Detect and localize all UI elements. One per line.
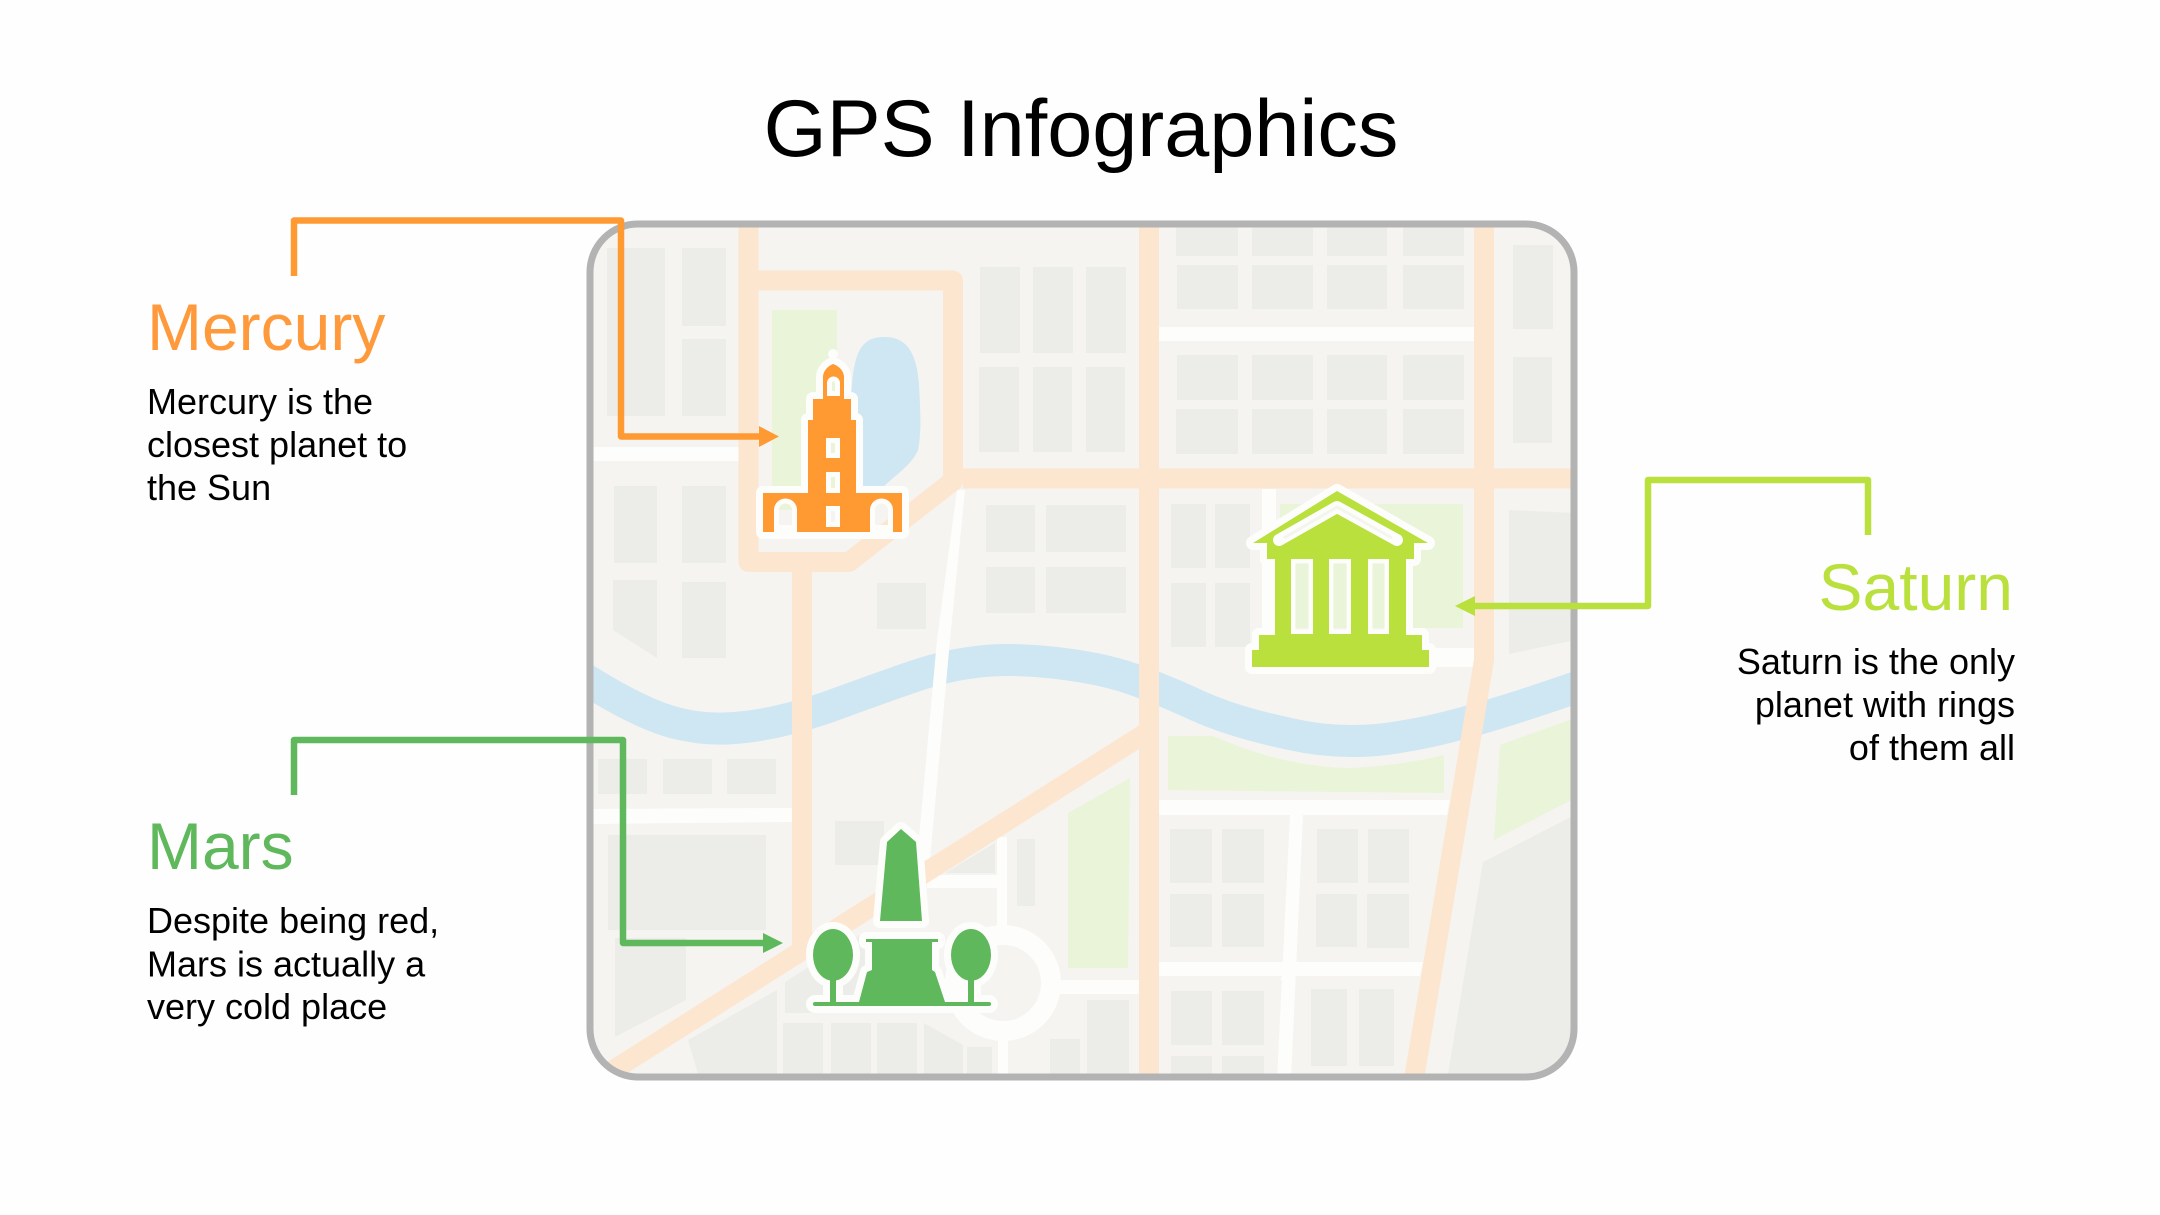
icon: tower (Mercury) — [763, 349, 902, 532]
text: Mars description: very cold place — [147, 986, 387, 1027]
text: Saturn description: planet with rings — [1755, 684, 2015, 725]
text: Mars description: Despite being red, — [147, 900, 439, 941]
text: Saturn description: of them all — [1849, 727, 2015, 768]
connector arrow: Mercury — [294, 220, 779, 447]
title: GPS Infographics — [764, 84, 1398, 174]
callout: Mercury — [147, 220, 779, 508]
map parks — [772, 310, 1575, 968]
icon: monument with trees (Mars) — [813, 829, 991, 1006]
map panel — [580, 220, 1580, 1085]
heading: Mercury: Mercury — [147, 290, 385, 364]
map buildings — [598, 227, 1575, 1080]
callout: Saturn — [1455, 480, 2015, 768]
connector arrow: Mars — [294, 740, 783, 953]
map orange roads — [596, 220, 1580, 1085]
icon: temple (Saturn) — [1252, 491, 1429, 667]
map white streets — [590, 327, 1474, 1080]
text: Mars description: Mars is actually a — [147, 944, 426, 984]
text: Mercury description: the Sun — [147, 467, 271, 508]
map river — [580, 660, 1580, 741]
text: Saturn description: Saturn is the only — [1737, 641, 2015, 682]
map frame — [590, 224, 1574, 1077]
heading: Mars: Mars — [147, 809, 294, 883]
map lake — [849, 337, 920, 490]
callout: Mars — [147, 740, 783, 1027]
text: Mercury description: closest planet to — [147, 424, 407, 465]
connector arrow: Saturn — [1455, 480, 1868, 616]
heading: Saturn: Saturn — [1819, 550, 2013, 624]
text: Mercury description: Mercury is the — [147, 381, 373, 422]
